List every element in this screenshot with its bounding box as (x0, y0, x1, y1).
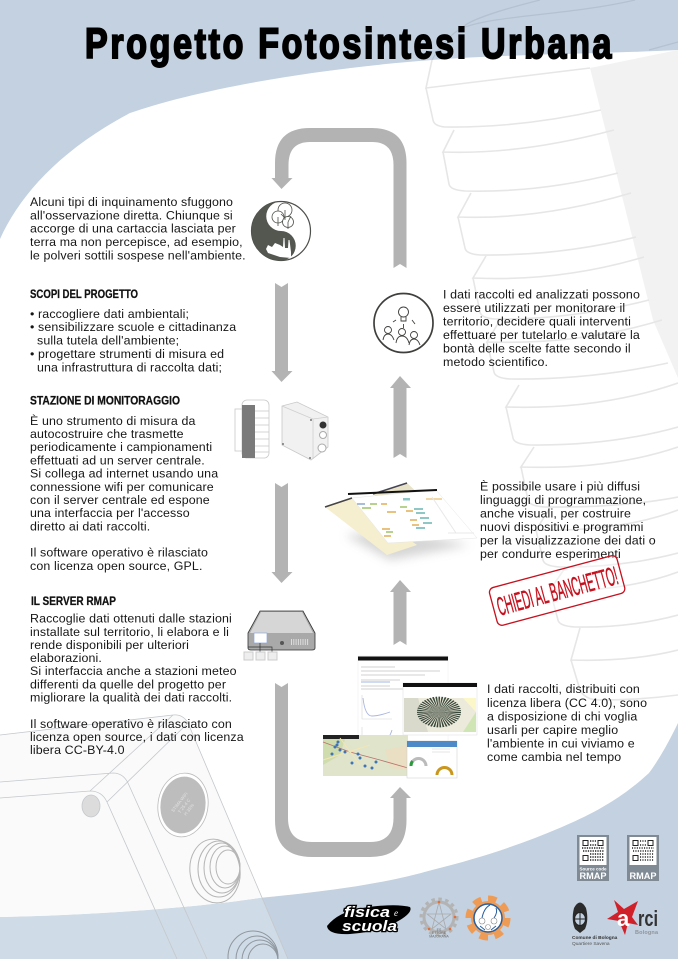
map panel (323, 735, 408, 776)
round display label: H 35% (183, 803, 195, 816)
intro text (30, 195, 246, 262)
logo: Comune di Bologna: Quartiere Savena (572, 941, 610, 947)
software text: per condurre esperimenti (480, 547, 621, 561)
station text: connessione wifi per comunicare (30, 480, 214, 494)
main chart panel (358, 656, 448, 753)
heading: stazione di monitoraggio: STAZIONE DI MONITORAGGIO (30, 396, 180, 408)
QR card: source code RMAP (577, 835, 609, 881)
station text: diretto ai dati raccolti. (30, 519, 150, 533)
station text: con il server centrale ed espone (30, 493, 210, 507)
logo: arci Bologna: rci (638, 906, 658, 931)
stamp: chiedi al banchetto (488, 555, 626, 626)
server text (30, 612, 244, 757)
open data text: usarli per capire meglio (487, 723, 618, 737)
enclosure fill over blue band (0, 715, 288, 959)
aims list: sulla tutela dell'ambiente; (37, 333, 179, 347)
station text: periodicamente i campionamenti (30, 440, 212, 454)
logo: arci Bologna: a (617, 906, 630, 931)
aims list: una infrastruttura di raccolta dati; (37, 360, 222, 374)
screw (82, 795, 100, 817)
software text: linguaggi di programmazione, (480, 493, 646, 507)
server text: Raccoglie dati ottenuti dalle stazioni (30, 612, 232, 626)
open data text (487, 682, 647, 764)
QR card: source code RMAP: RMAP (580, 871, 606, 881)
intro text: Alcuni tipi di inquinamento sfuggono (30, 195, 233, 209)
software text: anche visuali, per costruire (480, 506, 631, 520)
server text: Il software operativo è rilasciato con (30, 717, 232, 731)
logo: arci Bologna (607, 900, 659, 936)
software text: per la visualizzazione dei dati o (480, 534, 656, 548)
software text: nuovi dispositivi e programmi (480, 520, 644, 534)
logo: istituto Ettore Majorana: ES (437, 928, 442, 932)
station text: effettuati ad un server centrale. (30, 453, 205, 467)
arrow: top loop from decisions back to intro (272, 128, 406, 268)
logo: istituto Ettore Majorana (421, 899, 457, 938)
intro text: terra ma non percepisce, ad esempio, (30, 235, 243, 249)
lower cable gland rings (228, 931, 278, 959)
station text: con licenza open source, GPL. (30, 559, 203, 573)
icon: enclosure box (282, 402, 328, 460)
arrow: aims to station (272, 483, 292, 583)
decisions text: bontà delle scelte fatte secondo il (443, 342, 631, 356)
aims list: • sensibilizzare scuole e cittadinanza (30, 320, 236, 334)
server text: differenti da quelle del progetto per (30, 678, 226, 692)
logo: fisica e scuola: scuola (342, 918, 397, 935)
station text: autocostruire che trasmette (30, 427, 184, 441)
heading: scopi del progetto: SCOPI DEL PROGETTO (30, 289, 138, 301)
station text: una interfaccia per l'accesso (30, 506, 190, 520)
QR card: source code RMAP: Source code (579, 866, 607, 872)
round display label: T 25.4 C (177, 797, 192, 814)
logo: Comune di Bologna: Comune di Bologna (572, 935, 618, 941)
arrow: intro to project aims (272, 283, 292, 382)
open data text: licenza libera (CC 4.0), sono (487, 696, 647, 710)
server text: elaborazioni. (30, 651, 102, 665)
server text: Si interfaccia anche a stazioni meteo (30, 664, 237, 678)
icon: server (244, 611, 315, 660)
gauges panel (407, 741, 457, 778)
open data text: a disposizione di chi voglia (487, 710, 637, 724)
open data text: come cambia nel tempo (487, 750, 621, 764)
decisions text: territorio, decidere quali interventi (443, 314, 631, 328)
wind rose panel (403, 683, 477, 735)
arrow: software to decisions (390, 376, 411, 458)
cable gland rings (186, 836, 244, 906)
server text: migliorare la qualità dei dati raccolti. (30, 690, 232, 704)
logo: fisica e scuola: fisica (344, 904, 390, 921)
arrow: server loop to open data (275, 683, 411, 857)
decisions text: effettuare per tutelarlo e valutare la (443, 328, 640, 342)
logo: fisica e scuola (327, 904, 411, 935)
open data text: I dati raccolti, distribuiti con (487, 682, 640, 696)
aims list (30, 307, 236, 374)
server text: libera CC-BY-4.0 (30, 743, 125, 757)
station text: È uno strumento di misura da (30, 413, 196, 428)
decisions text: metodo scientifico. (443, 355, 548, 369)
icon: people and light bulb (374, 294, 433, 352)
logo: istituto Ettore Majorana: MAJORANA (429, 934, 449, 938)
heading: il server rmap: IL SERVER RMAP (31, 596, 116, 608)
server text: rende disponibili per ulteriori (30, 638, 189, 652)
title: Progetto Fotosintesi Urbana (85, 20, 614, 68)
aims list: • raccogliere dati ambientali; (30, 307, 189, 321)
logo: fisica e scuola: e (394, 908, 398, 918)
radiation shield drawing background (426, 0, 678, 700)
logo: arci Bologna: Bologna (635, 930, 659, 936)
decisions text (443, 288, 640, 369)
software screenshots (325, 483, 477, 560)
server text: licenza open source, i dati con licenza (30, 730, 244, 744)
decisions text: I dati raccolti ed analizzati possono (443, 288, 640, 302)
software text (480, 478, 656, 561)
server text: installate sul territorio, li elabora e li (30, 625, 229, 639)
intro text: le polveri sottili sospese nell'ambiente. (30, 248, 246, 262)
software text: È possibile usare i più diffusi (480, 478, 640, 494)
icon: radiation shield sensor (235, 400, 269, 458)
station text (30, 413, 218, 573)
round display label (154, 770, 212, 840)
intro text: all'osservazione diretta. Chiunque si (30, 208, 233, 222)
aims list: • progettare strumenti di misura ed (30, 347, 224, 361)
QR card: RMAP: RMAP (630, 871, 656, 881)
open data text: l'ambiente in cui viviamo e (487, 736, 635, 750)
QR card: RMAP (627, 835, 659, 881)
decisions text: essere utilizzati per monitorare il (443, 301, 625, 315)
logo: orange gear (468, 898, 508, 938)
arrow: open data to software (390, 580, 411, 645)
station text: Il software operativo è rilasciato (30, 546, 208, 560)
logo: istituto Ettore Majorana: ETTORE (432, 931, 447, 935)
round display label: STIMA WiFi (170, 791, 189, 813)
intro text: accorge di una cartaccia lasciata per (30, 222, 236, 236)
logo: Comune di Bologna (572, 902, 618, 947)
enclosure box drawing (0, 715, 288, 959)
data screenshots (323, 656, 477, 778)
station text: Si collega ad internet usando una (30, 467, 218, 481)
icon: yin-yang nature and city (252, 202, 310, 260)
